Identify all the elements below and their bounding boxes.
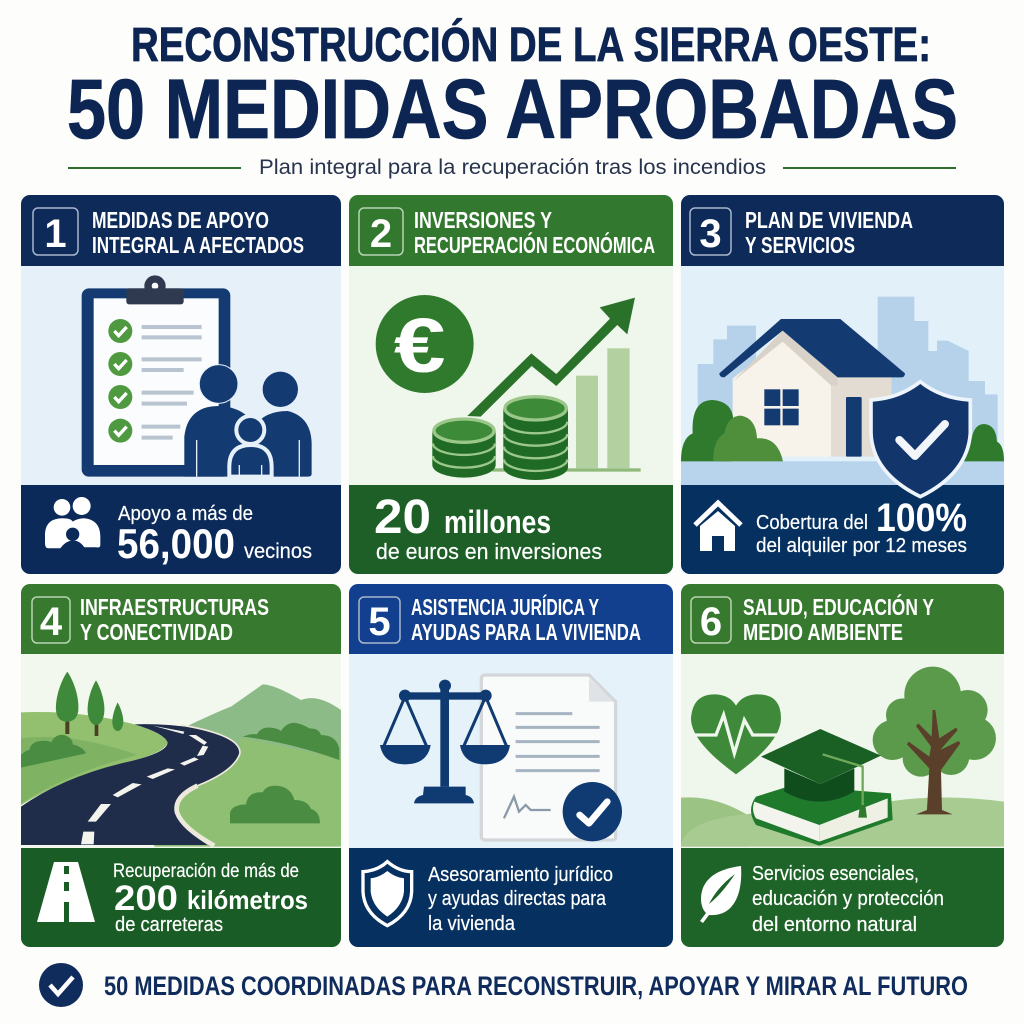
- icon: euro, coins, growth chart: €: [394, 303, 445, 389]
- stat 1: vecinos: [244, 540, 312, 563]
- number 5: [359, 597, 400, 644]
- number 1: 1: [44, 212, 67, 256]
- stat 6: [681, 848, 1004, 947]
- number 3: [690, 208, 731, 256]
- heading 4: [80, 594, 269, 645]
- icon: house: [695, 503, 741, 551]
- stat 5: [349, 848, 673, 947]
- number 4: 4: [40, 600, 63, 644]
- heading 3: [745, 207, 913, 258]
- icon: shield with check: [871, 382, 970, 497]
- icon: check: [39, 963, 83, 1007]
- stat 1: 56,000: [117, 520, 235, 567]
- heading 6: [743, 593, 934, 645]
- illustration: house and trees: [681, 297, 1004, 485]
- number 6: 6: [700, 600, 722, 644]
- icon: clipboard and family: [82, 275, 312, 477]
- icon: heart, graduation cap, book and tree: [681, 667, 1004, 847]
- heading 6: SALUD, EDUCACIÓN Y: [743, 593, 934, 620]
- icon: road: [37, 862, 95, 922]
- icon: shield: [363, 862, 412, 926]
- panel 6: salud y educación: [681, 584, 1004, 947]
- heading 2: INVERSIONES Y: [414, 207, 552, 233]
- number 4: [32, 597, 70, 644]
- number 3: 3: [699, 212, 722, 256]
- heading 2: [414, 207, 655, 258]
- illustration: road and hills: [21, 672, 341, 847]
- number 6: [691, 597, 731, 644]
- heading 5: [411, 593, 641, 645]
- number 1: [33, 208, 78, 256]
- icon: euro, coins, growth chart: [376, 295, 641, 480]
- number 5: 5: [368, 600, 391, 644]
- heading 4: Y CONECTIVIDAD: [80, 619, 233, 645]
- footer: [39, 963, 968, 1007]
- panel 3: vivienda: [681, 195, 1004, 574]
- icon: people: [45, 497, 100, 548]
- heading 1: [92, 207, 304, 258]
- number 2: [359, 208, 403, 256]
- heading 3: Y SERVICIOS: [745, 232, 855, 258]
- title: [67, 17, 958, 156]
- stat 6: educación y protección: [752, 888, 944, 910]
- number 2: 2: [370, 212, 392, 256]
- panel 5: asistencia jurídica: [349, 584, 673, 947]
- stat 2: [349, 485, 673, 574]
- stat 3: [681, 485, 1004, 574]
- subtitle: Plan integral para la recuperación tras los incendios: [259, 156, 766, 179]
- stat 2: 20: [374, 491, 431, 544]
- stat 5: Asesoramiento jurídico: [428, 864, 613, 886]
- heading 5: ASISTENCIA JURÍDICA Y: [411, 593, 599, 620]
- heading 1: INTEGRAL A AFECTADOS: [92, 232, 304, 258]
- stat 6: del entorno natural: [752, 914, 917, 936]
- heading 3: PLAN DE VIVIENDA: [745, 207, 913, 233]
- stat 4: de carreteras: [115, 914, 223, 936]
- stat 4: 200: [114, 879, 178, 918]
- heading 2: RECUPERACIÓN ECONÓMICA: [414, 231, 655, 258]
- panel 4: infraestructuras: [21, 584, 341, 947]
- stat 4: [21, 848, 341, 947]
- stat 3: del alquiler por 12 meses: [756, 535, 967, 557]
- heading 5: AYUDAS PARA LA VIVIENDA: [411, 619, 641, 645]
- stat 4: kilómetros: [187, 885, 308, 915]
- stat 5: y ayudas directas para: [428, 888, 607, 910]
- stat 3: Cobertura del: [756, 512, 868, 534]
- stat 2: de euros en inversiones: [376, 539, 602, 564]
- stat 1: [21, 485, 341, 574]
- icon: scales and document: [380, 675, 622, 841]
- stat 6: Servicios esenciales,: [752, 863, 919, 885]
- panel 1: apoyo integral: [21, 195, 341, 574]
- stat 4: Recuperación de más de: [113, 861, 299, 882]
- heading 1: MEDIDAS DE APOYO: [92, 207, 269, 233]
- icon: leaf: [700, 866, 741, 923]
- heading 6: MEDIO AMBIENTE: [743, 619, 903, 645]
- stat 3: 100%: [876, 496, 967, 540]
- stat 1: Apoyo a más de: [118, 503, 253, 525]
- stat 2: millones: [444, 504, 551, 540]
- heading 4: INFRAESTRUCTURAS: [80, 594, 269, 620]
- panel 2: inversiones: [349, 195, 673, 574]
- stat 5: la vivienda: [428, 913, 516, 935]
